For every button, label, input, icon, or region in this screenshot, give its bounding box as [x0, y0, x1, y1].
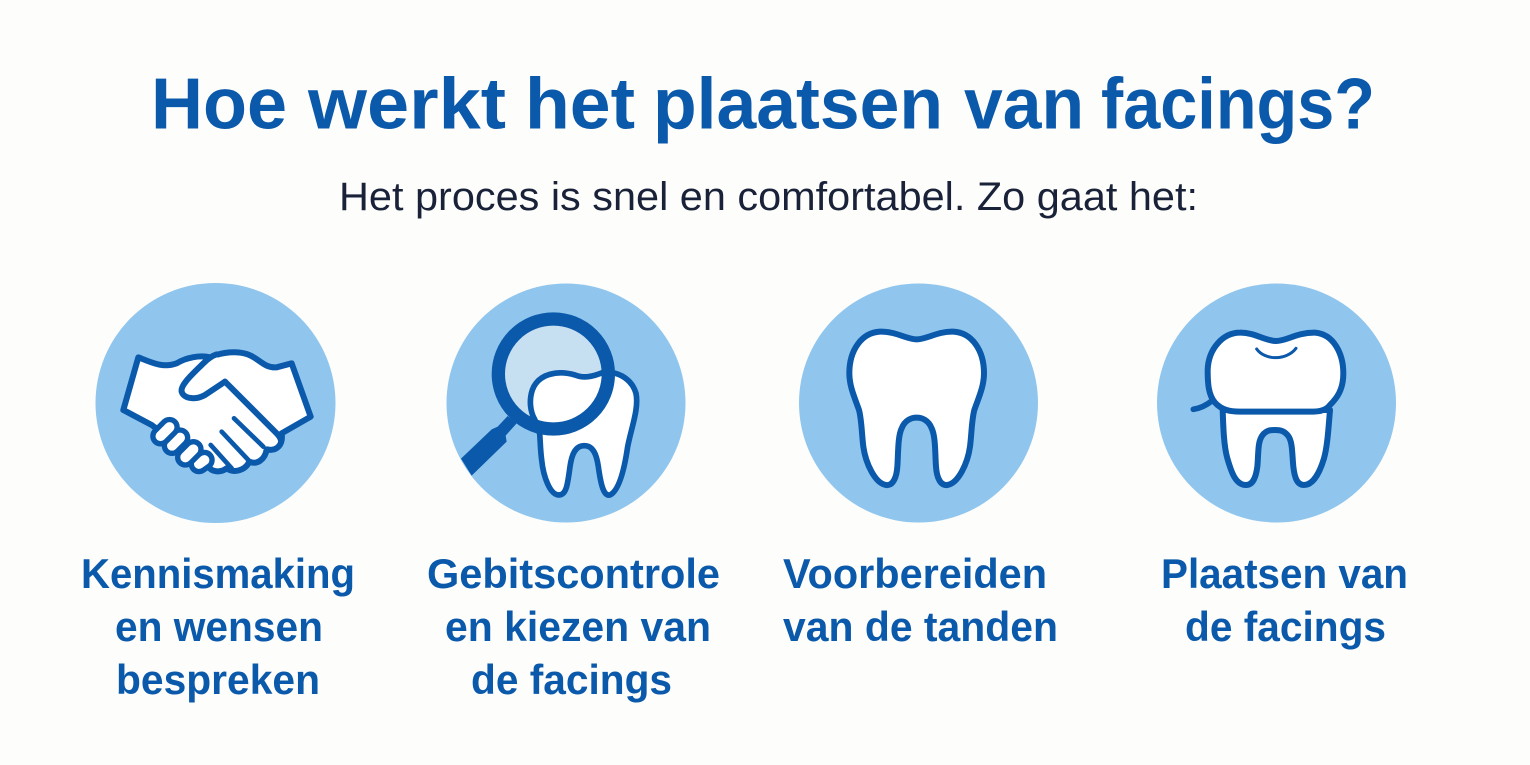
title: plaatsen — [653, 64, 943, 144]
step 4: tooth with facing — [1157, 284, 1408, 650]
title: Hoe — [151, 64, 287, 144]
icon: tooth with facing — [1193, 333, 1343, 485]
label: step 2: Gebitscontrole — [427, 550, 720, 597]
label: step 3: Voorbereiden — [783, 550, 1047, 597]
title: het — [525, 64, 635, 144]
step 3: tooth — [783, 284, 1058, 650]
step 1: handshake — [81, 283, 355, 703]
label: step 1 — [81, 550, 355, 703]
icon: tooth circle — [799, 284, 1038, 522]
label: step 1: Kennismaking — [81, 550, 355, 597]
icon: handshake — [123, 352, 311, 475]
label: step 3: van de tanden — [783, 603, 1058, 650]
title — [151, 64, 1375, 144]
label: step 4: Plaatsen van — [1161, 550, 1408, 597]
label: step 1: bespreken — [116, 656, 320, 703]
label: step 3 — [783, 550, 1058, 650]
label: step 2: de facings — [471, 656, 672, 703]
icon: handshake circle — [96, 283, 336, 523]
title: facings? — [1101, 64, 1375, 144]
icon: tooth — [849, 332, 984, 485]
icon: magnifier over tooth — [461, 319, 637, 495]
label: step 1: en wensen — [115, 603, 323, 650]
title: van — [964, 64, 1084, 144]
subtitle: Het proces is snel en comfortabel. Zo gaat het: — [339, 175, 1198, 219]
icon: facing circle — [1157, 284, 1396, 522]
label: step 2: en kiezen van — [445, 603, 711, 650]
label: step 4: de facings — [1185, 603, 1386, 650]
title: werkt — [307, 64, 506, 144]
label: step 4 — [1161, 550, 1408, 650]
step 2: magnifier and tooth — [427, 284, 720, 703]
label: step 2 — [427, 550, 720, 703]
icon: magnifier circle — [446, 284, 686, 522]
